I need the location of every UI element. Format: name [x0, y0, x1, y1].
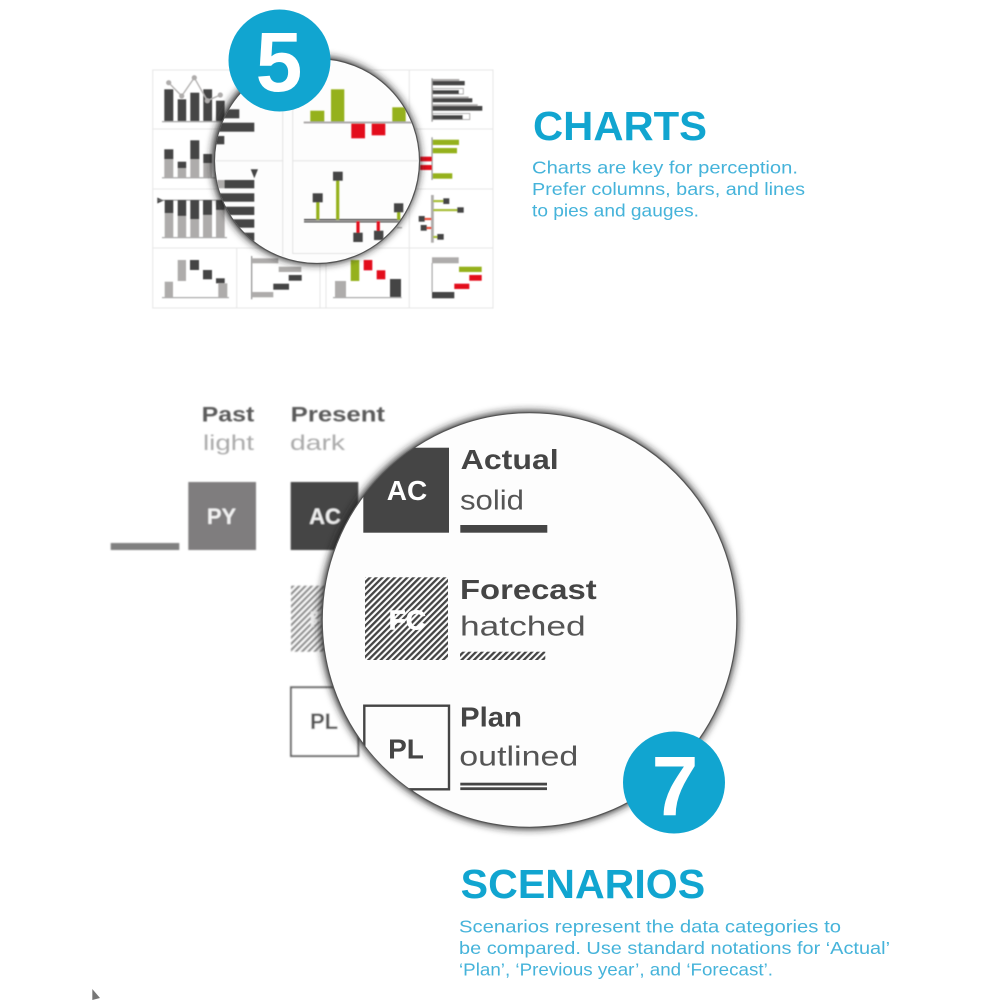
- icon: small corner triangle: [92, 989, 100, 1000]
- magnified charts: [216, 88, 418, 258]
- swatch: AC: AC: [309, 504, 341, 529]
- badge: number 5: 5: [256, 15, 302, 109]
- badge: number 7: 7: [652, 739, 698, 833]
- badge: number 7: [623, 732, 725, 834]
- column header: present: Present: [291, 404, 385, 427]
- swatch: FC: [291, 586, 358, 652]
- chart: horizontal waterfall coloured: [432, 257, 482, 298]
- magnifier: charts: [214, 58, 420, 264]
- panel: charts section: [153, 10, 805, 308]
- chart: stacked columns: [162, 140, 224, 178]
- magnified column variance chart: [304, 89, 416, 138]
- legend: plan: PL: [388, 734, 424, 764]
- chart: 100 percent stacked columns: [157, 198, 227, 238]
- text block: scenarios description: [459, 916, 890, 980]
- chart grid and small charts: [153, 70, 493, 308]
- text block: charts description: Prefer columns, bars, and lines: [532, 179, 805, 199]
- legend: forecast: Forecast: [460, 574, 597, 605]
- infographic canvas: [92, 10, 889, 1000]
- magnifier shadow: scenarios: [320, 411, 738, 829]
- chart: vertical waterfall coloured: [333, 260, 402, 298]
- text block: charts description: [532, 158, 805, 221]
- legend: actual: Actual: [461, 444, 559, 475]
- text block: scenarios description: ‘Plan’, ‘Previous year’, and ‘Forecast’.: [459, 960, 773, 980]
- legend: plan: outlined: [459, 741, 578, 772]
- column header: past: [202, 404, 254, 455]
- column header: past: Past: [202, 404, 254, 427]
- magnified lollipop chart: [304, 172, 405, 242]
- chart: horizontal waterfall grey: [251, 256, 302, 299]
- text block: charts description: Charts are key for perception.: [532, 158, 798, 178]
- legend: actual: solid: [460, 484, 524, 515]
- text block: scenarios description: Scenarios represent the data categories to: [459, 916, 841, 936]
- chart: vertical waterfall grey: [162, 260, 229, 298]
- badge: number 5: [228, 10, 330, 112]
- legend: plan: [364, 702, 578, 790]
- swatch: PL: PL: [310, 709, 338, 734]
- legend: plan: Plan: [460, 702, 522, 733]
- chart: horizontal lollipops: [397, 195, 464, 243]
- legend: actual: [363, 444, 559, 533]
- legend: forecast: [365, 574, 597, 660]
- legend: actual: AC: [387, 475, 427, 506]
- swatch: PY: [188, 482, 256, 550]
- magnified legend: [363, 444, 597, 790]
- chart: columns with line: [162, 75, 226, 122]
- panel: scenarios section: [111, 404, 890, 980]
- legend: forecast: hatched: [460, 611, 586, 642]
- swatch: AC: [291, 482, 358, 550]
- swatch: line past: [111, 543, 179, 550]
- chart: horizontal bars with comparison: [431, 78, 482, 122]
- heading: scenarios: SCENARIOS: [461, 861, 705, 907]
- heading: charts: CHARTS: [533, 103, 707, 149]
- column header: present: [290, 404, 385, 455]
- magnified horizontal bars: [216, 108, 258, 242]
- legend: forecast: FC: [389, 604, 426, 636]
- chart: horizontal variance bars: [420, 137, 459, 180]
- column header: present: dark: [290, 432, 346, 455]
- text block: charts description: to pies and gauges.: [532, 201, 699, 221]
- swatch: FC: FC: [309, 607, 339, 632]
- text block: scenarios description: be compared. Use standard notations for ‘Actual’: [459, 938, 890, 958]
- swatch: PL: [291, 687, 358, 756]
- magnifier shadow: charts: [212, 56, 420, 264]
- swatch: PY: PY: [207, 504, 236, 529]
- column header: past: light: [203, 432, 254, 455]
- magnifier: scenarios: [322, 413, 737, 827]
- scenario swatches behind magnifier: [111, 404, 385, 756]
